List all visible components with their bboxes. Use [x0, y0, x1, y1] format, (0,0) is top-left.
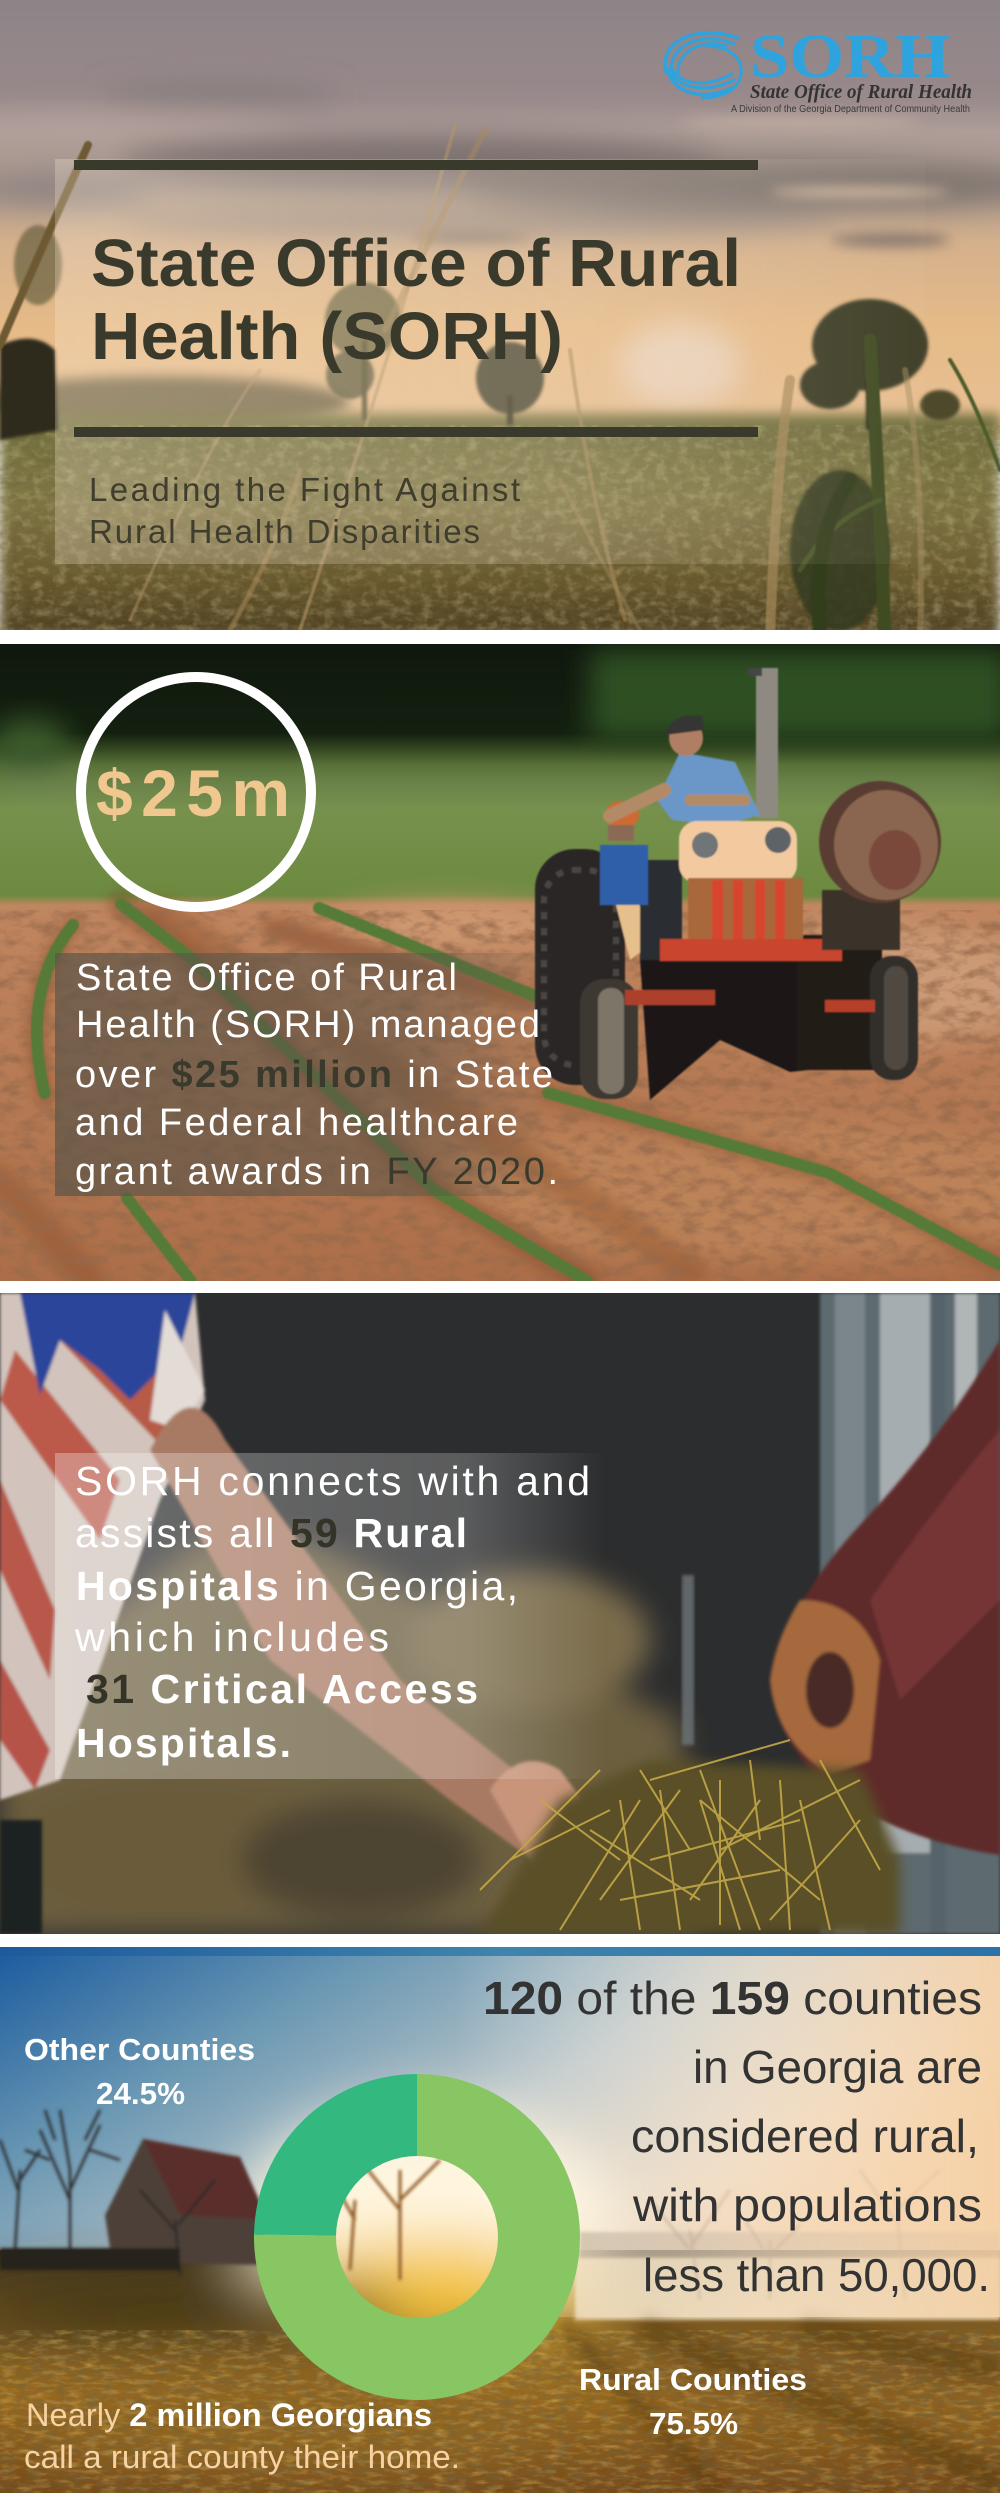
- logo division line: A Division of the Georgia Department of Community Health: [731, 103, 970, 115]
- icon: logo swirl: [665, 33, 741, 98]
- heading: rural county statistic: [483, 1972, 990, 2301]
- heading: title: State Office of Rural: [91, 226, 741, 301]
- text block: rural hospitals: SORH connects with and: [75, 1458, 590, 1504]
- heading: title: Health (SORH): [91, 299, 563, 374]
- text block: 2 million Georgians: call a rural county their home.: [24, 2439, 460, 2475]
- logo wordmark: SORH: [750, 23, 950, 91]
- text block: rural hospitals: Hospitals.: [76, 1720, 291, 1766]
- top rule: [74, 160, 758, 170]
- chart label: other counties: Other Counties: [24, 2032, 255, 2067]
- panel: $25 million grants: [0, 644, 1000, 1281]
- text block: 2 million Georgians: [24, 2397, 460, 2475]
- chart label: other counties: [24, 2032, 255, 2111]
- heading: rural county statistic: less than 50,000.: [643, 2249, 990, 2301]
- chart label: rural counties: Rural Counties: [579, 2362, 807, 2397]
- panel: rural counties: [0, 1947, 1000, 2493]
- text block: grant awards: State Office of Rural: [76, 957, 457, 999]
- heading: rural county statistic: 120 of the 159 counties: [483, 1972, 982, 2024]
- text block: rural hospitals: which includes: [74, 1614, 389, 1660]
- text block: rural hospitals: [74, 1458, 590, 1766]
- text block: grant awards: and Federal healthcare: [75, 1102, 518, 1144]
- photo: farmer on tractor in field: [0, 644, 1000, 1281]
- bottom rule: [74, 427, 758, 437]
- chart label: rural counties: [579, 2362, 807, 2441]
- text block: rural hospitals: Hospitals in Georgia,: [76, 1563, 518, 1609]
- text block: grant awards: grant awards in FY 2020.: [75, 1151, 558, 1193]
- top colour strip: [0, 1947, 1000, 1956]
- chart label: other counties: 24.5%: [96, 2076, 185, 2111]
- subtitle: [89, 471, 520, 550]
- logo tagline: State Office of Rural Health: [750, 81, 972, 103]
- chart label: rural counties: 75.5%: [649, 2406, 738, 2441]
- stat value: $25m: [96, 756, 290, 830]
- text panel: [55, 953, 555, 1196]
- donut chart: county share: [254, 2074, 580, 2400]
- text block: rural hospitals: 31 Critical Access: [86, 1666, 478, 1712]
- subtitle: Leading the Fight Against: [89, 471, 520, 508]
- segment: other counties 24.5%: [254, 2074, 417, 2236]
- text block: 2 million Georgians: Nearly 2 million Georgians: [26, 2397, 432, 2433]
- subtitle: Rural Health Disparities: [89, 513, 480, 550]
- heading: rural county statistic: considered rural,: [631, 2110, 979, 2162]
- text block: grant awards: Health (SORH) managed: [76, 1004, 540, 1046]
- heading: rural county statistic: in Georgia are: [693, 2041, 982, 2093]
- photo: hand feeding hay to a cow: [0, 1293, 1000, 1934]
- translucent text panel: [0, 1956, 1000, 2317]
- stat circle: [81, 677, 311, 907]
- text block: grant awards: over $25 million in State: [75, 1054, 553, 1096]
- translucent title panel: [55, 159, 925, 564]
- panel: rural hospitals: [0, 1293, 1000, 1934]
- panel: header: [0, 0, 1000, 640]
- photo: sunset over grass field: [0, 0, 1000, 640]
- photo: barn and trees at sunrise: [0, 1947, 1000, 2493]
- segment: rural counties 75.5%: [254, 2074, 580, 2400]
- text panel: [55, 1453, 605, 1779]
- text block: rural hospitals: assists all 59 Rural: [75, 1510, 467, 1556]
- logo: SORH: [665, 23, 972, 115]
- heading: rural county statistic: with populations: [632, 2179, 982, 2231]
- text block: grant awards: [75, 957, 558, 1193]
- heading: title: [91, 226, 741, 374]
